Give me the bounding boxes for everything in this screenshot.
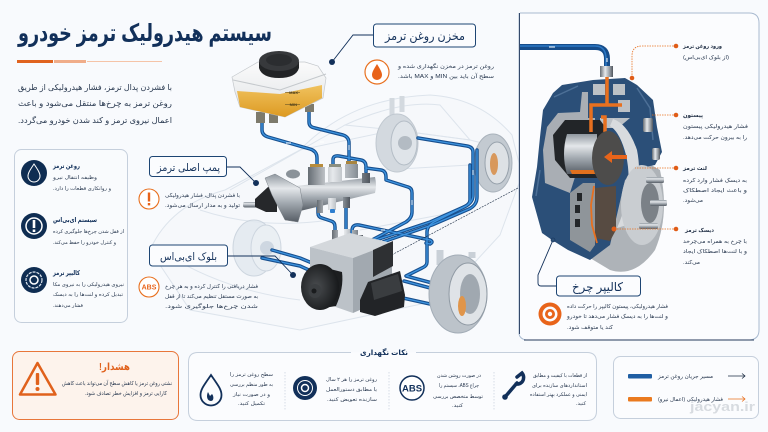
reservoir description xyxy=(397,63,494,80)
tip: quality parts: استانداردهای سازنده برای xyxy=(532,383,587,389)
item: brake fluid: و روانکاری قطعات را دارد. xyxy=(53,186,112,192)
item: brake fluid: وظیفه انتقال نیرو xyxy=(52,175,98,181)
panel: wheel caliper detail xyxy=(519,13,759,340)
item: ABS system xyxy=(21,213,124,246)
callout: fluid inlet: (از بلوک ای‌بی‌اس) xyxy=(683,54,729,61)
item: brake caliper: فشار می‌دهند. xyxy=(53,303,84,309)
label: ABS block: بلوک ای‌بی‌اس xyxy=(160,251,217,263)
reservoir tank xyxy=(232,62,326,117)
caliper description xyxy=(566,303,668,331)
tip: quality parts: ایمنی و عملکرد بهتر استفاده xyxy=(530,392,587,398)
reservoir cap xyxy=(259,51,299,78)
tip: fluid level: و در صورت نیاز xyxy=(232,392,271,398)
caliper description: و لنت‌ها را به دیسک فشار می‌دهد تا خودرو xyxy=(566,313,668,320)
item: ABS system: و کنترل خودرو را حفظ می‌کند. xyxy=(53,240,117,246)
ghost wheel: front right xyxy=(429,250,487,333)
callout: brake pad xyxy=(682,166,748,204)
callout: piston xyxy=(683,113,748,141)
callout: brake pad: و باعث ایجاد اصطکاک xyxy=(683,187,747,194)
disc crescent xyxy=(610,119,639,228)
disc face xyxy=(621,165,663,245)
tip: quality parts: از قطعات با کیفیت و مطابق xyxy=(533,373,587,379)
pad orange line xyxy=(591,186,597,243)
electrical connector xyxy=(360,271,405,316)
force arrow xyxy=(604,151,627,163)
item: ABS system: سیستم ای‌بی‌اس xyxy=(53,217,97,224)
brake disc rear xyxy=(585,150,664,272)
intro paragraph xyxy=(18,83,172,125)
tip: replace fluid: روغن ترمز را هر ۲ سال xyxy=(326,377,378,383)
block front face xyxy=(310,247,353,313)
label: reservoir xyxy=(329,24,476,65)
intro paragraph: اعمال نیروی ترمز و کند شدن خودرو می‌گردد. xyxy=(18,115,172,125)
tip: replace fluid: یا مطابق دستورالعمل xyxy=(326,387,378,393)
label: master cylinder xyxy=(150,156,259,186)
intro paragraph: با فشردن پدال ترمز، فشار هیدرولیکی از طریق xyxy=(18,83,172,92)
callout: brake pad: می‌شود. xyxy=(683,198,703,204)
tip: fluid level: تکمیل کنید. xyxy=(238,401,266,407)
callout: brake pad: لنت ترمز xyxy=(682,166,707,172)
tip: ABS light: ABS xyxy=(402,384,422,394)
callout: piston: فشار هیدرولیکی پیستون xyxy=(683,123,748,130)
master cylinder description xyxy=(165,192,241,209)
car ghost illustration xyxy=(150,95,522,330)
caliper grey cut band xyxy=(543,92,595,193)
icon: warning circle xyxy=(139,189,159,209)
callout: brake disc: دیسک ترمز xyxy=(684,227,714,234)
item: brake caliper: کالیپر ترمز xyxy=(52,270,80,277)
piston face xyxy=(592,131,624,185)
item: brake caliper: تبدیل کرده و لنت‌ها را به دیسک xyxy=(53,292,124,298)
item: brake caliper: نیروی هیدرولیکی را به نیروی مکا xyxy=(53,282,124,288)
tip: ABS light: توسط متخصص بررسی xyxy=(433,394,484,400)
top boss xyxy=(286,170,300,178)
item: brake caliper xyxy=(21,267,124,309)
reservoir description: روغن ترمز در مخزن نگهداری شده و xyxy=(397,63,494,70)
label: master cylinder: پمپ اصلی ترمز xyxy=(156,162,220,174)
panel: maintenance tips xyxy=(188,348,596,420)
watermark: jacyan.ir xyxy=(689,399,755,414)
callout: fluid inlet xyxy=(682,44,729,61)
warning text: نشتی روغن ترمز یا کاهش سطح آن می‌تواند باعث کاهش xyxy=(62,380,172,387)
callout: piston: پیستون xyxy=(683,113,703,119)
wheel hub and studs xyxy=(639,177,667,229)
callout: brake disc: می‌کند. xyxy=(683,259,700,266)
label: ABS block xyxy=(150,245,296,278)
supply pipe xyxy=(520,46,607,68)
block side face xyxy=(353,243,392,313)
brake fluid pipes xyxy=(262,108,477,304)
tip: fluid level xyxy=(200,372,273,407)
warning text xyxy=(62,380,172,397)
warning text: کارایی ترمز و افزایش خطر تصادف شود. xyxy=(85,390,167,397)
dividers xyxy=(285,372,494,410)
intro paragraph: روغن ترمز به چرخ‌ها منتقل می‌شود و باعث xyxy=(18,99,172,108)
brake pad xyxy=(595,186,616,241)
ABS description xyxy=(165,283,259,310)
cylinder body xyxy=(296,177,376,211)
legend: fluid path: مسیر جریان روغن ترمز xyxy=(657,374,713,380)
min and max markers: MIN xyxy=(290,102,297,107)
callout: brake disc: و با لنت‌ها اصطکاک ایجاد xyxy=(683,248,747,255)
icon: oil drop xyxy=(365,60,389,84)
reservoir description: سطح آن باید بین MIN و MAX باشد. xyxy=(398,73,494,80)
icon: warning triangle xyxy=(20,363,56,394)
item: brake fluid: روغن ترمز xyxy=(52,163,80,170)
label: wheel caliper xyxy=(538,238,640,296)
ABS description: فشار دریافتی را کنترل کرده و به هر چرخ xyxy=(165,283,258,290)
dashed pointer to wheel detail xyxy=(367,188,518,268)
reservoir ports xyxy=(256,104,314,123)
legend: hydraulic pressure: فشار هیدرولیکی (اعمال نیرو) xyxy=(658,396,723,403)
callout: piston: را به بیرون حرکت می‌دهد. xyxy=(683,134,747,141)
maintenance title: نکات نگهداری xyxy=(360,348,408,357)
callouts xyxy=(614,46,676,229)
title underline xyxy=(17,60,162,63)
caliper highlights xyxy=(536,86,653,196)
block top face xyxy=(310,233,392,258)
tip: quality parts: کنید. xyxy=(576,401,587,407)
legend: hydraulic pressure xyxy=(628,396,745,403)
ABS description: شدن چرخ‌ها جلوگیری شود. xyxy=(165,303,259,310)
lid seam xyxy=(233,74,326,90)
brake fluid reservoir xyxy=(232,51,326,123)
tip: fluid level: سطح روغن ترمز را xyxy=(230,372,273,378)
icon: ABS badge: ABS xyxy=(142,284,157,292)
tip: ABS light: در صورت روشن شدن xyxy=(437,373,481,379)
piston xyxy=(564,134,597,174)
warning title: هشدار! xyxy=(99,362,130,373)
min and max markers: MAX xyxy=(289,90,298,95)
label: reservoir: مخزن روغن ترمز xyxy=(384,29,465,44)
item: brake fluid xyxy=(21,160,112,192)
tip: ABS light: کنید. xyxy=(452,403,464,409)
icon: orange disc xyxy=(538,302,562,326)
min and max markers xyxy=(285,90,300,107)
callout: brake disc: با چرخ به همراه می‌چرخد xyxy=(683,239,748,245)
callout: brake disc xyxy=(683,227,748,266)
legend xyxy=(614,356,758,418)
lower ports xyxy=(317,197,350,213)
tip: quality parts xyxy=(502,373,587,407)
label: wheel caliper: کالیپر چرخ xyxy=(572,280,623,295)
legend: fluid path xyxy=(628,374,745,380)
fitting xyxy=(600,66,613,77)
hydraulic channel xyxy=(591,77,622,132)
ABS description: به صورت مستقل تنظیم می‌کند تا از قفل xyxy=(165,293,258,300)
ghost wheel: rear right xyxy=(474,134,512,192)
tip: ABS light: چراغ ABS، سیستم را xyxy=(439,383,479,389)
upper ports xyxy=(308,164,370,185)
ghost wheel: front left xyxy=(233,220,281,276)
caliper body xyxy=(532,78,662,260)
ghost wheel: rear left xyxy=(376,96,418,172)
tip: ABS light xyxy=(400,373,484,409)
master cylinder xyxy=(243,161,376,222)
mounting flange xyxy=(265,174,303,222)
upper grey section xyxy=(593,84,630,128)
panel: warning xyxy=(12,352,178,420)
lower grey section xyxy=(570,183,595,252)
caliper description: کند یا متوقف شود. xyxy=(567,324,613,331)
tip: fluid level: به طور منظم بررسی xyxy=(230,382,273,388)
icon: ABS badge xyxy=(139,277,159,297)
tip: replace fluid: سازنده تعویض کنید. xyxy=(327,397,377,403)
caliper bolts xyxy=(643,118,660,160)
cylinder dark cavity xyxy=(553,120,606,178)
panel: brake components xyxy=(14,150,128,322)
callout: brake pad: به دیسک فشار وارد کرده xyxy=(683,177,748,184)
master cylinder description: تولید و به مدار ارسال می‌شود. xyxy=(165,203,241,209)
title: سیستم هیدرولیک ترمز خودرو xyxy=(17,20,272,47)
pump motor xyxy=(318,266,342,309)
brake fluid level xyxy=(237,85,322,117)
caliper description: فشار هیدرولیکی، پیستون کالیپر را حرکت داده xyxy=(567,303,668,310)
callout: fluid inlet: ورود روغن ترمز xyxy=(682,44,723,50)
push rod xyxy=(243,202,257,208)
ABS block xyxy=(301,229,405,316)
rubber boot xyxy=(255,187,277,212)
control unit xyxy=(373,241,393,277)
master cylinder description: با فشردن پدال، فشار هیدرولیکی xyxy=(165,192,240,199)
tip: replace fluid xyxy=(293,376,378,403)
item: ABS system: از قفل شدن چرخ‌ها جلوگیری کرده xyxy=(53,228,124,235)
ABS connectors xyxy=(332,229,363,244)
